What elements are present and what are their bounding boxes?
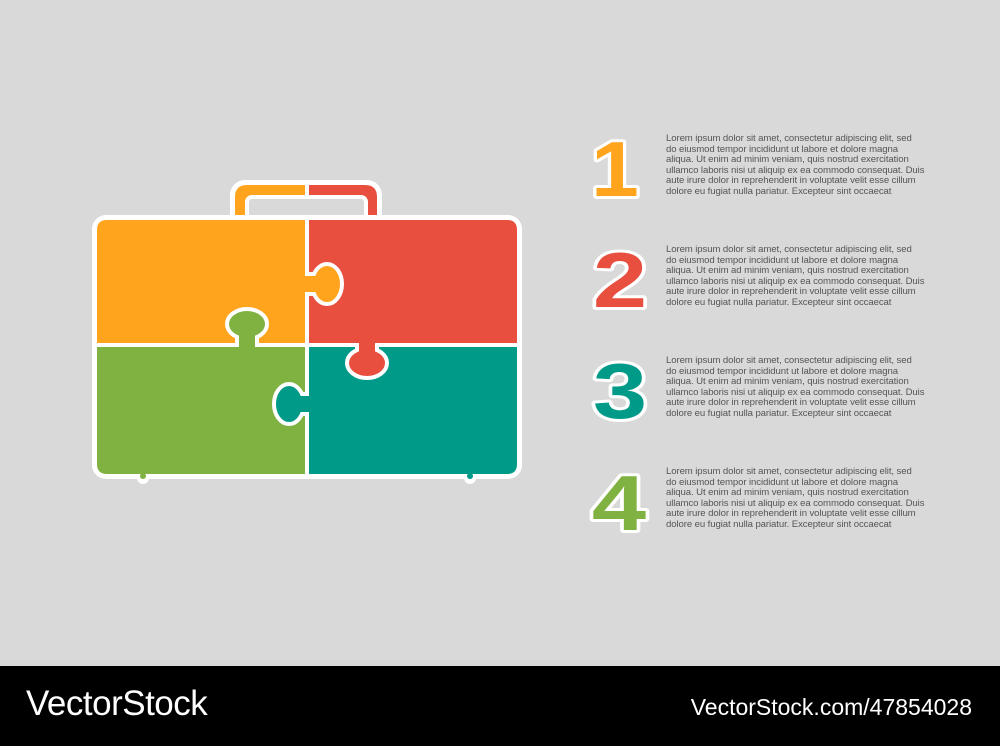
text 3 bbox=[666, 355, 924, 419]
text 3: ullamco laboris nisi ut aliquip ex ea commodo consequat. Duis bbox=[666, 387, 924, 398]
knob: red into teal bbox=[347, 341, 387, 378]
footer logo: VectorStock bbox=[26, 684, 207, 723]
text 3: Lorem ipsum dolor sit amet, consectetur adipiscing elit, sed bbox=[666, 355, 912, 366]
text 3: do eiusmod tempor incididunt ut labore et dolore magna bbox=[666, 366, 898, 377]
text 3: aute irure dolor in reprehenderit in voluptate velit esse cillum bbox=[666, 397, 916, 408]
text 2: aliqua. Ut enim ad minim veniam, quis nostrud exercitation bbox=[666, 265, 909, 276]
number 3: 3 bbox=[593, 347, 647, 435]
text 4: dolore eu fugiat nulla pariatur. Excepteur sint occaecat bbox=[666, 519, 891, 530]
case body bbox=[92, 215, 522, 484]
knob: orange into red bbox=[303, 264, 342, 304]
text 4: aute irure dolor in reprehenderit in voluptate velit esse cillum bbox=[666, 508, 916, 519]
footer bar bbox=[0, 666, 1000, 746]
footer id: VectorStock.com/47854028 bbox=[691, 694, 972, 720]
text 4: ullamco laboris nisi ut aliquip ex ea commodo consequat. Duis bbox=[666, 498, 924, 509]
text 1: do eiusmod tempor incididunt ut labore et dolore magna bbox=[666, 144, 898, 155]
numbers bbox=[591, 127, 647, 547]
text 2: do eiusmod tempor incididunt ut labore et dolore magna bbox=[666, 255, 898, 266]
text 4: aliqua. Ut enim ad minim veniam, quis nostrud exercitation bbox=[666, 487, 909, 498]
text 1: dolore eu fugiat nulla pariatur. Excepteur sint occaecat bbox=[666, 186, 891, 197]
text 1: aute irure dolor in reprehenderit in voluptate velit esse cillum bbox=[666, 175, 916, 186]
text 4 bbox=[666, 466, 924, 530]
number 2: 2 bbox=[593, 236, 647, 324]
text 1: Lorem ipsum dolor sit amet, consectetur adipiscing elit, sed bbox=[666, 133, 912, 144]
text 2: Lorem ipsum dolor sit amet, consectetur adipiscing elit, sed bbox=[666, 244, 912, 255]
number 4: 4 bbox=[592, 459, 646, 547]
text 4: Lorem ipsum dolor sit amet, consectetur adipiscing elit, sed bbox=[666, 466, 912, 477]
text 2: ullamco laboris nisi ut aliquip ex ea commodo consequat. Duis bbox=[666, 276, 924, 287]
text 2: dolore eu fugiat nulla pariatur. Excepteur sint occaecat bbox=[666, 297, 891, 308]
number 1: 1 bbox=[591, 127, 639, 213]
text 1: ullamco laboris nisi ut aliquip ex ea commodo consequat. Duis bbox=[666, 165, 924, 176]
knob: green into orange bbox=[227, 309, 267, 349]
text 2: aute irure dolor in reprehenderit in voluptate velit esse cillum bbox=[666, 286, 916, 297]
handle bbox=[230, 180, 382, 230]
text 4: do eiusmod tempor incididunt ut labore et dolore magna bbox=[666, 477, 898, 488]
text 2 bbox=[666, 244, 924, 308]
knob: teal into green bbox=[274, 384, 311, 424]
text 3: aliqua. Ut enim ad minim veniam, quis nostrud exercitation bbox=[666, 376, 909, 387]
text 1 bbox=[666, 133, 924, 197]
text 1: aliqua. Ut enim ad minim veniam, quis nostrud exercitation bbox=[666, 154, 909, 165]
text 3: dolore eu fugiat nulla pariatur. Excepteur sint occaecat bbox=[666, 408, 891, 419]
